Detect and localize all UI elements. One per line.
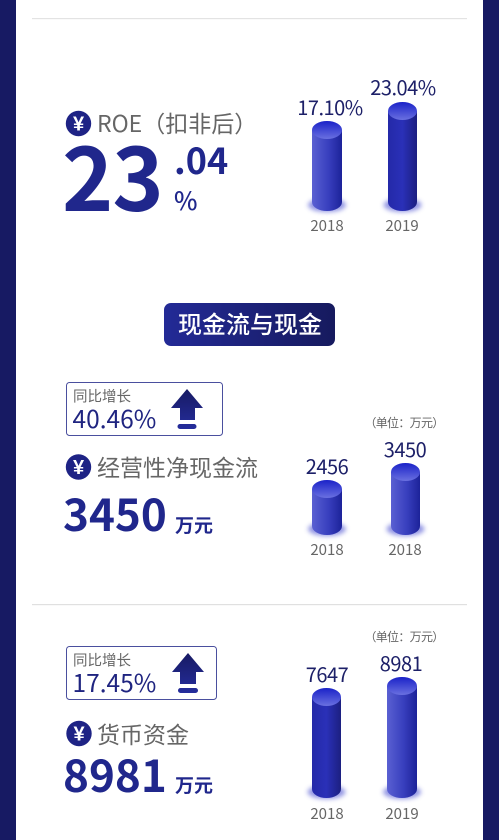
value: 8981 — [63, 741, 167, 805]
heading: 经营性净现金流 — [97, 449, 258, 483]
left side band — [0, 0, 16, 840]
value: 万元 — [175, 771, 213, 798]
year labels — [310, 539, 422, 560]
ROE heading: ROE（扣非后） — [97, 105, 257, 139]
bar 2018 — [308, 688, 346, 799]
panel: monetary funds — [63, 646, 216, 805]
value labels: 7647 — [306, 659, 349, 688]
value labels: 8981 — [380, 648, 422, 677]
value — [63, 480, 213, 544]
year labels: 2018 — [310, 539, 344, 560]
value labels: 17.10% — [297, 92, 363, 121]
year labels: 2018 — [388, 539, 422, 560]
value labels: 2456 — [306, 451, 349, 480]
value: 万元 — [175, 511, 213, 538]
icon: yen badge: ¥ — [73, 457, 85, 479]
growth callout — [66, 382, 222, 436]
growth callout — [66, 646, 216, 700]
bar 2019 — [383, 677, 421, 799]
ROE big value — [62, 111, 228, 237]
chart: cash flow cylinders — [306, 414, 444, 560]
icon: yen badge — [66, 721, 92, 746]
growth callout: 同比增长 — [73, 650, 131, 670]
year labels: 2018 — [310, 215, 344, 236]
unit note: （单位：万元） — [364, 628, 444, 645]
icon: yen badge: ¥ — [73, 724, 85, 746]
year labels: 2018 — [310, 803, 344, 824]
top divider — [32, 18, 467, 19]
value labels — [297, 72, 436, 121]
year labels: 2019 — [385, 803, 419, 824]
value labels: 3450 — [384, 434, 427, 463]
unit note: （单位：万元） — [364, 414, 444, 431]
value labels — [306, 434, 427, 480]
year labels: 2019 — [385, 215, 419, 236]
growth callout: 同比增长 — [73, 386, 131, 406]
panel: ROE — [62, 105, 257, 237]
ROE big value: % — [174, 182, 197, 218]
year labels — [310, 803, 419, 824]
icon: up arrow — [171, 389, 203, 429]
value labels — [306, 648, 422, 688]
year labels — [310, 215, 419, 236]
icon: yen badge — [66, 111, 91, 136]
value: 3450 — [63, 480, 167, 544]
icon: yen badge — [66, 454, 91, 480]
value — [63, 741, 213, 805]
value labels: 23.04% — [370, 72, 436, 101]
bar 2019 — [384, 102, 422, 212]
bar 3450 — [386, 463, 424, 536]
middle divider — [32, 604, 467, 605]
heading: 货币资金 — [97, 716, 189, 750]
growth callout: 17.45% — [72, 665, 156, 700]
growth callout: 40.46% — [72, 401, 156, 436]
icon: yen badge: ¥ — [73, 114, 85, 136]
bar 2456 — [308, 480, 346, 536]
section heading pill: 现金流与现金 — [178, 305, 322, 340]
chart: monetary funds cylinders — [306, 628, 444, 824]
icon: up arrow — [172, 653, 204, 693]
ROE big value: 23 — [62, 111, 163, 237]
panel: operating cash flow — [63, 382, 258, 544]
ROE big value: .04 — [174, 133, 228, 185]
right side band — [483, 0, 499, 840]
chart: ROE cylinders — [297, 72, 436, 236]
section heading pill — [164, 303, 335, 346]
bar 2018 — [308, 121, 346, 212]
